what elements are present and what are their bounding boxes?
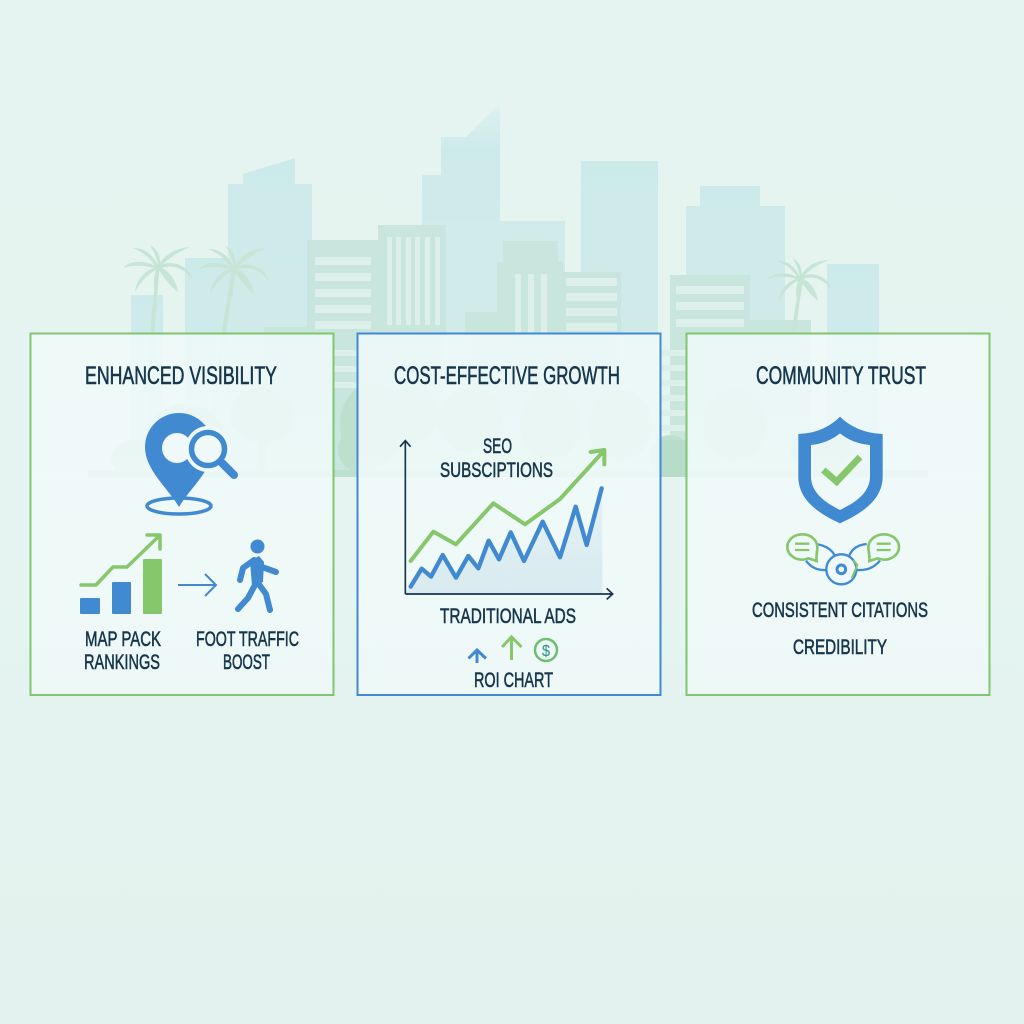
- heading: community trust: COMMUNITY TRUST: [756, 362, 926, 390]
- city skyline backdrop: [88, 103, 928, 477]
- label: foot traffic boost: BOOST: [223, 650, 270, 674]
- label: seo subscriptions: [440, 434, 553, 482]
- icon: map pack bar chart: [80, 535, 162, 614]
- arrow: rankings to foot traffic: [178, 574, 216, 596]
- label: credibility: CREDIBILITY: [793, 635, 887, 659]
- icon: dollar coin: $: [542, 643, 550, 660]
- heading: enhanced visibility: ENHANCED VISIBILITY: [85, 362, 277, 390]
- icon: map pin with magnifier: [145, 413, 234, 514]
- panel: cost-effective growth: [358, 334, 660, 695]
- heading: cost-effective growth: COST-EFFECTIVE GROWTH: [394, 362, 620, 390]
- label: map pack rankings: [84, 627, 161, 674]
- panel: enhanced visibility: [30, 334, 334, 695]
- icon: green up arrow: [502, 637, 522, 660]
- label: roi chart: ROI CHART: [474, 668, 553, 692]
- icon: shield with check: [798, 417, 883, 523]
- street trees: [111, 383, 850, 476]
- icon: connected chat bubbles: [787, 534, 899, 584]
- palm trees: [123, 245, 832, 470]
- label: map pack rankings: MAP PACK: [85, 627, 161, 651]
- label: consistent citations: CONSISTENT CITATIONS: [752, 598, 928, 622]
- ground band: [88, 470, 928, 477]
- icon: dollar coin: [535, 639, 557, 661]
- label: foot traffic boost: [196, 627, 299, 674]
- panel: community trust: [686, 334, 990, 695]
- icon: blue up arrow: [468, 650, 486, 663]
- label: traditional ads: TRADITIONAL ADS: [440, 604, 576, 628]
- label: foot traffic boost: FOOT TRAFFIC: [196, 627, 299, 651]
- label: map pack rankings: RANKINGS: [84, 650, 160, 674]
- line chart: [400, 441, 613, 599]
- label: seo subscriptions: SUBSCIPTIONS: [440, 458, 553, 482]
- icon: walking person: [238, 540, 276, 610]
- label: seo subscriptions: SEO: [483, 434, 512, 458]
